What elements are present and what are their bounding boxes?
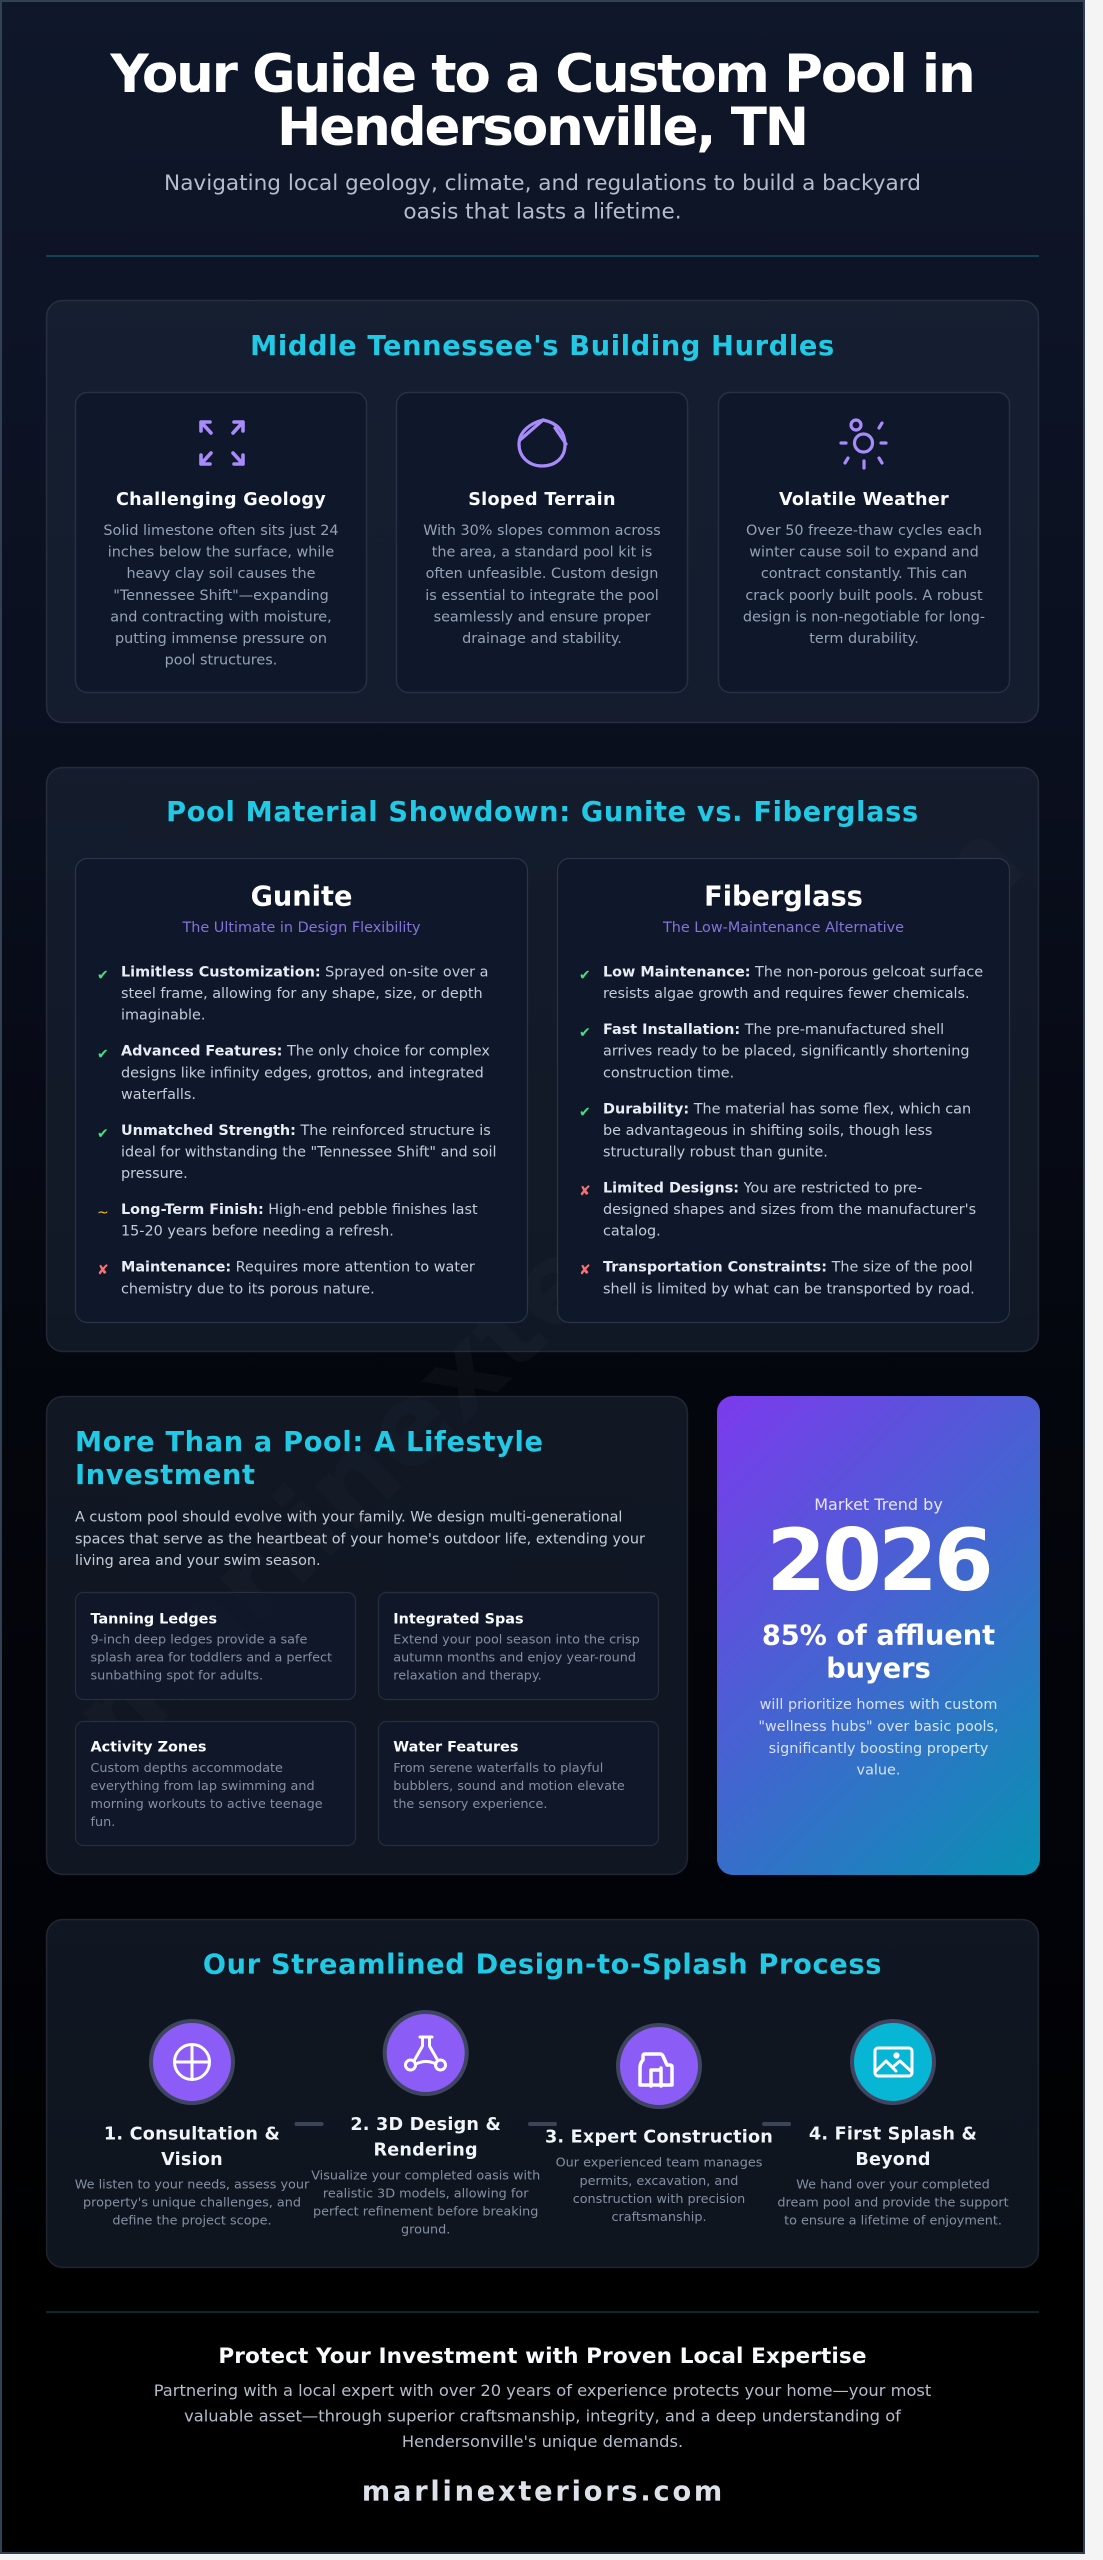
card: volatile weather: design is non-negotiable for long- [743, 609, 985, 625]
footer paragraph: valuable asset—through superior craftsmanship, integrity, and a deep understanding of [184, 2406, 902, 2426]
panel: process [46, 1920, 1038, 2268]
list: fiberglass pros and cons [579, 964, 983, 1297]
card: activity zones: everything from lap swimming and [90, 1779, 315, 1794]
subtitle [164, 171, 921, 224]
card: volatile weather: winter cause soil to expand and [749, 545, 979, 561]
step 2: realistic 3D models, allowing for [323, 2186, 529, 2201]
footer paragraph: Hendersonville's unique demands. [402, 2432, 683, 2451]
card: tanning ledges: splash area for toddlers and a perfect [90, 1650, 332, 1666]
card: tanning ledges: 9-inch deep ledges provide a safe [90, 1632, 308, 1648]
card: challenging geology: putting immense pressure on [115, 631, 327, 647]
card: water features: From serene waterfalls to playful [393, 1761, 603, 1776]
card: volatile weather: Over 50 freeze-thaw cycles each [746, 523, 982, 539]
list: fiberglass pros and cons: ✔ [579, 1025, 591, 1041]
heading: hurdles: Middle Tennessee's Building Hurdles [250, 331, 835, 362]
card: volatile weather: term durability. [809, 631, 919, 647]
step 2: 2. 3D Design & [350, 2115, 501, 2135]
panel: building hurdles [46, 300, 1038, 722]
card: tanning ledges: sunbathing spot for adults. [90, 1668, 263, 1684]
callout: market trend 2026: value. [857, 1763, 900, 1779]
list: fiberglass pros and cons: Durability: The material has some flex, which can [603, 1101, 971, 1117]
card: activity zones: Activity Zones [90, 1740, 206, 1756]
step 4: to ensure a lifetime of enjoyment. [784, 2214, 1002, 2228]
icon: expand arrows [201, 422, 243, 464]
card: sloped terrain: is essential to integrate the pool [425, 588, 659, 604]
step 4: Beyond [855, 2150, 931, 2170]
card: integrated spas: Extend your pool season into the crisp [393, 1632, 640, 1648]
header [109, 44, 974, 224]
subtitle: oasis that lasts a lifetime. [403, 200, 682, 224]
footer paragraph: Partnering with a local expert with over 20 years of experience protects your home—your most [154, 2381, 931, 2400]
list: gunite pros and cons: Maintenance: Requires more attention to water [121, 1260, 475, 1276]
heading: lifestyle: Investment [75, 1460, 256, 1491]
heading: process: Our Streamlined Design-to-Splash Process [203, 1949, 882, 1980]
icon: droplet [519, 420, 566, 466]
card: challenging geology: inches below the surface, while [108, 545, 334, 561]
step 3: craftsmanship. [611, 2210, 707, 2225]
step 2: perfect refinement before breaking [313, 2204, 538, 2220]
intro paragraph: spaces that serve as the heartbeat of your home's outdoor life, extending your [75, 1531, 645, 1547]
list: fiberglass pros and cons: ✘ [579, 1184, 591, 1200]
card: activity zones: Custom depths accommodate [90, 1761, 283, 1776]
card: tanning ledges: Tanning Ledges [90, 1611, 217, 1627]
card: sloped terrain: the area, a standard pool kit is [432, 545, 652, 561]
footer [154, 2344, 931, 2508]
card: volatile weather: Volatile Weather [779, 490, 949, 510]
card: integrated spas: relaxation and therapy. [393, 1668, 542, 1684]
list: gunite pros and cons: pressure. [121, 1166, 188, 1182]
step 1: We listen to your needs, assess your [75, 2177, 310, 2192]
list: gunite pros and cons: 15-20 years before needing a refresh. [121, 1224, 394, 1240]
list: gunite pros and cons: ✔ [97, 1126, 109, 1142]
step 3: Our experienced team manages [556, 2156, 763, 2171]
list: gunite pros and cons: Advanced Features: The only choice for complex [121, 1044, 490, 1060]
list: fiberglass pros and cons: Fast Installation: The pre-manufactured shell [603, 1022, 944, 1038]
card: water features [378, 1722, 658, 1846]
card: sloped terrain: seamlessly and ensure proper [434, 609, 650, 625]
card: water features: Water Features [393, 1740, 518, 1756]
list: gunite pros and cons: ideal for withstanding the "Tennessee Shift" and soil [121, 1144, 497, 1160]
list: gunite pros and cons: ~ [97, 1205, 109, 1221]
card: challenging geology: Challenging Geology [116, 490, 326, 510]
card: sloped terrain: often unfeasible. Custom design [426, 566, 658, 582]
step 1 [75, 2021, 310, 2228]
list: fiberglass pros and cons: resists algae growth and requires fewer chemicals. [603, 986, 970, 1002]
step 2: Visualize your completed oasis with [311, 2168, 540, 2183]
step 4: We hand over your completed [796, 2177, 990, 2192]
step 2: Rendering [374, 2141, 478, 2161]
list: fiberglass pros and cons: ✘ [579, 1263, 591, 1279]
list: fiberglass pros and cons: shell is limited by what can be transported by road. [603, 1281, 975, 1297]
intro paragraph: living area and your swim season. [75, 1553, 321, 1569]
panel: lifestyle investment [46, 1396, 688, 1874]
step 2: ground. [401, 2223, 450, 2238]
step 1: 1. Consultation & [104, 2124, 280, 2144]
step 3: 3. Expert Construction [545, 2128, 773, 2148]
list: fiberglass pros and cons: Low Maintenance: The non-porous gelcoat surface [603, 964, 983, 980]
icon: consultation [151, 2021, 233, 2103]
card: challenging geology: and contracting with moisture, [110, 609, 332, 625]
heading: lifestyle: More Than a Pool: A Lifestyle [75, 1427, 544, 1458]
card: sloped terrain: drainage and stability. [462, 631, 622, 647]
callout: market trend 2026: "wellness hubs" over basic pools, [758, 1719, 999, 1735]
step 1: define the project scope. [112, 2214, 272, 2228]
connector arrows [294, 2122, 791, 2126]
watermark: marlinexteriors.com [47, 795, 1049, 1783]
title [109, 44, 974, 158]
card: volatile weather [718, 392, 1010, 692]
callout: market trend 2026: Market Trend by [814, 1495, 943, 1514]
subtitle: Navigating local geology, climate, and regulations to build a backyard [164, 171, 921, 196]
card: gunite: Gunite [251, 882, 352, 912]
card: sloped terrain [396, 392, 688, 692]
list: gunite pros and cons: designs like infinity edges, grottos, and integrated [121, 1065, 484, 1081]
callout: market trend 2026: buyers [826, 1654, 931, 1684]
title: Your Guide to a Custom Pool in [109, 44, 974, 105]
card: integrated spas: autumn months and enjoy year-round [393, 1650, 636, 1666]
step 3 [545, 2025, 773, 2225]
title: Hendersonville, TN [277, 97, 807, 158]
website: marlinexteriors.com [362, 2477, 725, 2508]
callout: market trend 2026: significantly boosting property [769, 1741, 989, 1757]
step 2 [311, 2012, 540, 2238]
callout: market trend 2026: 2026 [766, 1511, 990, 1611]
footer heading: Protect Your Investment with Proven Local Expertise [218, 2344, 867, 2369]
intro paragraph: A custom pool should evolve with your family. We design multi-generational [75, 1510, 622, 1526]
card: integrated spas: Integrated Spas [393, 1611, 524, 1627]
card: challenging geology [76, 392, 366, 692]
intro paragraph [75, 1510, 645, 1569]
list: gunite pros and cons: ✔ [97, 968, 109, 984]
card: challenging geology: heavy clay soil causes the [127, 566, 316, 582]
card: fiberglass [558, 858, 1010, 1322]
card: challenging geology: "Tennessee Shift"—expanding [113, 588, 329, 604]
heading: showdown: Pool Material Showdown: Gunite vs. Fiberglass [166, 797, 919, 828]
card: activity zones [76, 1722, 356, 1846]
callout: market trend 2026 [717, 1396, 1040, 1875]
list: gunite pros and cons: chemistry due to its porous nature. [121, 1281, 375, 1297]
card: integrated spas [378, 1592, 658, 1700]
callout: market trend 2026: 85% of affluent [762, 1620, 995, 1651]
card: gunite: The Ultimate in Design Flexibility [181, 920, 421, 936]
callout: market trend 2026: will prioritize homes with custom [760, 1697, 997, 1713]
list: gunite pros and cons: imaginable. [121, 1008, 205, 1024]
icon: sun [841, 420, 886, 468]
list: fiberglass pros and cons: Limited Designs: You are restricted to pre- [603, 1180, 922, 1196]
list: fiberglass pros and cons: be advantageous in shifting soils, though less [603, 1123, 932, 1139]
icon: construction [618, 2025, 700, 2107]
panel: material showdown [46, 768, 1038, 1352]
card: activity zones: fun. [90, 1815, 115, 1830]
list: fiberglass pros and cons: ✔ [579, 968, 591, 984]
card: sloped terrain: Sloped Terrain [468, 490, 616, 510]
step 3: permits, excavation, and [580, 2174, 738, 2189]
footer paragraph [154, 2381, 931, 2451]
icon: first splash image [852, 2021, 934, 2103]
card: water features: the sensory experience. [393, 1797, 547, 1812]
list: gunite pros and cons: steel frame, allowing for any shape, size, or depth [121, 986, 483, 1002]
step 4 [777, 2021, 1009, 2228]
card: tanning ledges [76, 1592, 356, 1700]
card: activity zones: morning workouts to active teenage [90, 1797, 323, 1812]
card: fiberglass: Fiberglass [704, 882, 863, 912]
list: gunite pros and cons [97, 964, 497, 1297]
card: volatile weather: crack poorly built pools. A robust [745, 588, 983, 604]
step 4: dream pool and provide the support [777, 2195, 1009, 2210]
icon: 3D design [385, 2012, 467, 2094]
list: gunite pros and cons: Unmatched Strength: The reinforced structure is [121, 1123, 491, 1139]
list: fiberglass pros and cons: Transportation Constraints: The size of the pool [603, 1260, 973, 1276]
card: volatile weather: contract constantly. This can [761, 566, 967, 582]
list: fiberglass pros and cons: catalog. [603, 1224, 661, 1240]
card: fiberglass: The Low-Maintenance Alternative [662, 920, 904, 936]
list: gunite pros and cons: Long-Term Finish: High-end pebble finishes last [121, 1202, 478, 1218]
list: gunite pros and cons: ✔ [97, 1047, 109, 1063]
list: fiberglass pros and cons: designed shapes and sizes from the manufacturer's [603, 1202, 976, 1218]
card: gunite [76, 858, 528, 1322]
list: fiberglass pros and cons: ✔ [579, 1104, 591, 1120]
heading: lifestyle [75, 1427, 544, 1491]
list: gunite pros and cons: waterfalls. [121, 1087, 196, 1103]
step 1: Vision [161, 2150, 223, 2170]
list: fiberglass pros and cons: arrives ready to be placed, significantly shortening [603, 1044, 970, 1060]
list: gunite pros and cons: ✘ [97, 1263, 109, 1279]
step 3: construction with precision [573, 2192, 745, 2207]
card: water features: bubblers, sound and motion elevate [393, 1779, 625, 1794]
step 1: property's unique challenges, and [83, 2195, 301, 2210]
list: gunite pros and cons: Limitless Customization: Sprayed on-site over a [121, 964, 488, 980]
list: fiberglass pros and cons: structurally robust than gunite. [603, 1144, 828, 1160]
step 4: 4. First Splash & [809, 2124, 977, 2144]
card: challenging geology: Solid limestone often sits just 24 [103, 523, 339, 539]
list: fiberglass pros and cons: construction time. [603, 1065, 734, 1081]
card: challenging geology: pool structures. [165, 653, 277, 669]
card: sloped terrain: With 30% slopes common across [423, 523, 661, 539]
